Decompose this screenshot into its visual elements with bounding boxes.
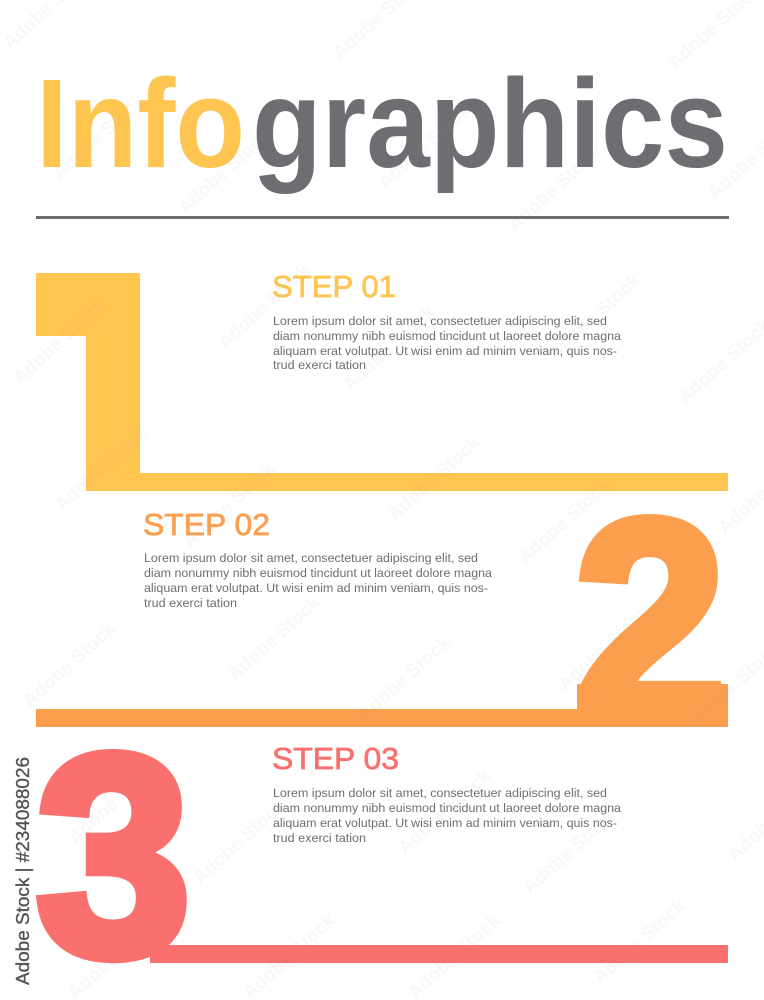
watermarks: Adobe Stock (174, 125, 275, 219)
step 1 text (273, 314, 621, 372)
step 2 text (144, 551, 492, 610)
step 2 text: diam nonummy nibh euismod tincidunt ut laoreet dolore magna (144, 566, 492, 580)
watermarks: Adobe Stock (519, 805, 620, 899)
panel: step 1 (36, 269, 728, 491)
watermarks: Adobe Stock (504, 142, 605, 236)
title: graphics (252, 53, 728, 194)
step 2 text: trud exerci tation (144, 596, 237, 610)
step 3 text (273, 786, 621, 845)
watermarks: Adobe Stock (19, 618, 120, 712)
step 1 heading: STEP 01 (272, 269, 396, 304)
watermarks: Adobe Stock (49, 90, 150, 184)
step 1 text: trud exerci tation (273, 358, 366, 372)
watermarks: Adobe Stock (384, 432, 485, 526)
watermarks: Adobe Stock (64, 755, 165, 849)
step 3 text: diam nonummy nibh euismod tincidunt ut laoreet dolore magna (273, 801, 621, 815)
watermarks: Adobe Stock (394, 765, 495, 859)
step 2 text: aliquam erat volutpat. Ut wisi enim ad minim veniam, quis nos- (144, 581, 488, 595)
watermarks: Adobe Stock (189, 795, 290, 889)
watermarks: Adobe Stock (544, 270, 645, 364)
step 1 text: diam nonummy nibh euismod tincidunt ut laoreet dolore magna (273, 329, 621, 343)
watermarks: Adobe Stock (51, 422, 152, 516)
big number 2: 2 (574, 462, 726, 780)
step 3 heading: STEP 03 (272, 741, 399, 776)
panel: step 2 (36, 462, 728, 780)
big number 3 (36, 697, 728, 1000)
panel: step 3 (36, 697, 728, 1000)
title divider (36, 216, 729, 219)
watermarks: Adobe Stock (9, 295, 110, 389)
watermarks: Adobe Stock (589, 895, 690, 989)
watermarks: Adobe Stock (224, 592, 325, 686)
step 3 text: trud exerci tation (273, 831, 366, 845)
step 1 text: Lorem ipsum dolor sit amet, consectetuer adipiscing elit, sed (273, 314, 607, 328)
watermarks: Adobe Stock (554, 602, 655, 696)
watermarks: Adobe Stock (514, 475, 615, 569)
step 2 text: Lorem ipsum dolor sit amet, consectetuer adipiscing elit, sed (144, 551, 478, 565)
step 1 text: aliquam erat volutpat. Ut wisi enim ad minim veniam, quis nos- (273, 344, 617, 358)
title (36, 53, 728, 194)
watermarks: Adobe Stock (214, 260, 315, 354)
watermarks: Adobe Stock (374, 100, 475, 194)
step 3 text: aliquam erat volutpat. Ut wisi enim ad minim veniam, quis nos- (273, 816, 617, 830)
title: Info (36, 53, 245, 194)
big number 1 (36, 273, 728, 491)
watermarks: Adobe Stock (354, 632, 455, 726)
watermarks: Adobe Stock (339, 302, 440, 396)
step 2 heading: STEP 02 (143, 507, 270, 542)
big number 2 (36, 462, 728, 780)
big number 1: 1 (86, 360, 136, 460)
stock credit: Adobe Stock | #234088026 (12, 757, 33, 985)
step 3 text: Lorem ipsum dolor sit amet, consectetuer adipiscing elit, sed (273, 786, 607, 800)
watermarks: Adobe Stock (179, 458, 280, 552)
